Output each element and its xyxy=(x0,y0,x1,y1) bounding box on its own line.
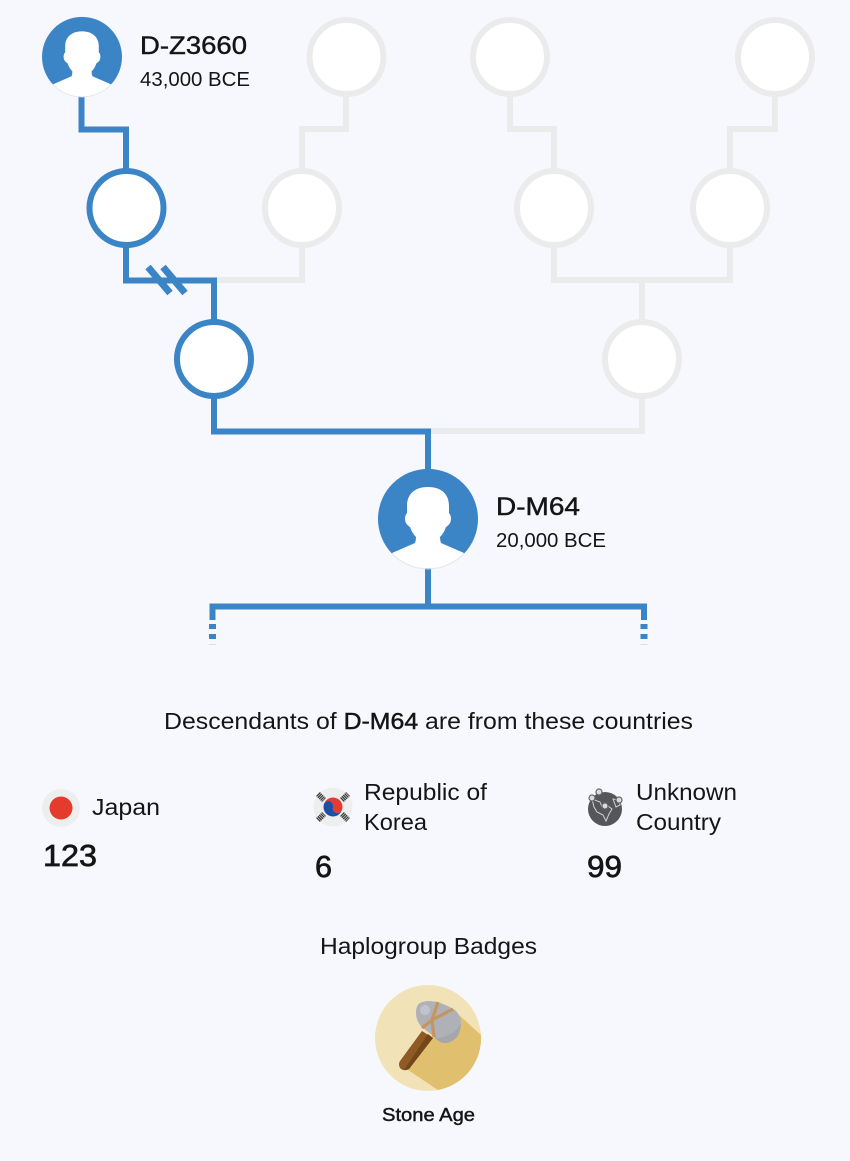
label: Republic of Korea: Korea xyxy=(364,809,427,835)
blue ancestor nodes xyxy=(90,171,251,396)
empty grey ancestor nodes xyxy=(265,20,812,396)
label: Republic of Korea: Republic of xyxy=(364,779,488,805)
icon: Japan flag xyxy=(42,789,80,827)
badge label: Stone Age: Stone Age xyxy=(382,1105,475,1125)
label: Unknown Country xyxy=(636,779,737,835)
icon: globe with pins xyxy=(588,789,622,826)
label: Unknown Country: Country xyxy=(636,809,722,835)
label: D-Z3660 xyxy=(140,32,250,91)
label: Republic of Korea xyxy=(364,779,488,835)
count: Unknown: 99 xyxy=(587,849,622,884)
grey inactive tree lines xyxy=(214,95,775,431)
badge: stone axe xyxy=(375,985,481,1091)
dashed continuation left xyxy=(209,624,216,645)
count: Korea: 6 xyxy=(315,849,332,884)
icon: Korea flag xyxy=(314,788,352,826)
label: Unknown Country: Unknown xyxy=(636,779,737,805)
label: D-M64: 20,000 BCE xyxy=(496,530,606,552)
count: Japan: 123 xyxy=(43,838,97,873)
heading: badges: Haplogroup Badges xyxy=(320,933,537,959)
label: D-Z3660: D-Z3660 xyxy=(140,32,247,60)
heading: descendants: Descendants of D-M64 are from these countries xyxy=(164,708,693,734)
label: D-M64 xyxy=(496,493,606,552)
dashed continuation right xyxy=(640,624,648,645)
skipped generations marker xyxy=(148,267,185,293)
avatar: D-M64 xyxy=(378,469,478,569)
blue lineage lines xyxy=(82,95,644,620)
label: D-Z3660: 43,000 BCE xyxy=(140,69,250,91)
label: Japan: Japan xyxy=(92,794,160,820)
avatar: D-Z3660 xyxy=(42,17,122,97)
label: D-M64: D-M64 xyxy=(496,493,580,521)
